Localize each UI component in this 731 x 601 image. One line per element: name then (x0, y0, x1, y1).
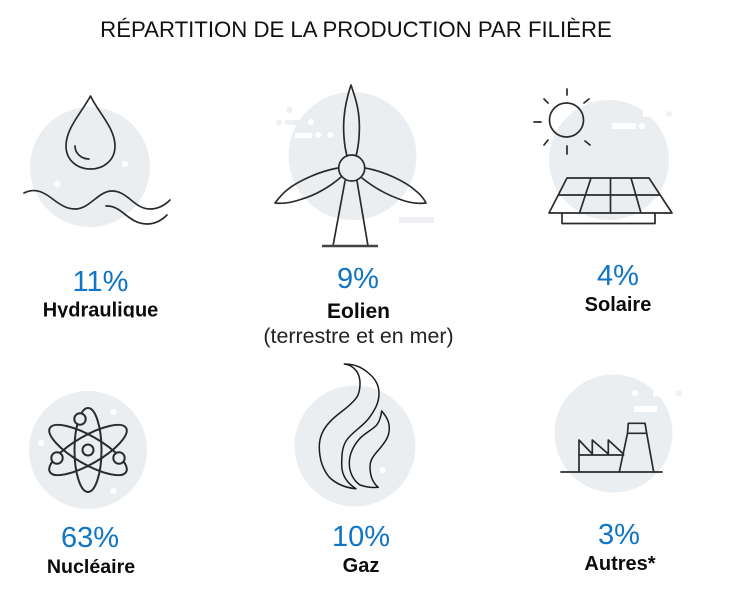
label: autres: Autres* (584, 553, 656, 575)
icon: factory (554, 374, 682, 492)
value: hydraulique: 11% (73, 266, 128, 298)
icon: atom (29, 391, 147, 509)
label: nucleaire: Nucléaire (47, 556, 135, 578)
title: RÉPARTITION DE LA PRODUCTION PAR FILIÈRE (100, 17, 612, 42)
value: gaz: 10% (332, 521, 390, 553)
icon: sun and solar panel (534, 89, 672, 224)
icon: wind turbine (275, 85, 434, 246)
icon: gas flame (294, 364, 416, 506)
label: eolien: Eolien (327, 300, 390, 323)
label: hydraulique: Hydraulique (43, 300, 158, 322)
value: autres: 3% (598, 519, 640, 551)
label: solaire: Solaire (585, 294, 651, 316)
icon: water drop and waves (24, 96, 170, 227)
label: gaz: Gaz (343, 555, 379, 577)
sublabel: eolien: (terrestre et en mer) (263, 324, 454, 348)
value: nucleaire: 63% (61, 522, 119, 554)
value: solaire: 4% (597, 260, 639, 292)
value: eolien: 9% (337, 263, 379, 295)
